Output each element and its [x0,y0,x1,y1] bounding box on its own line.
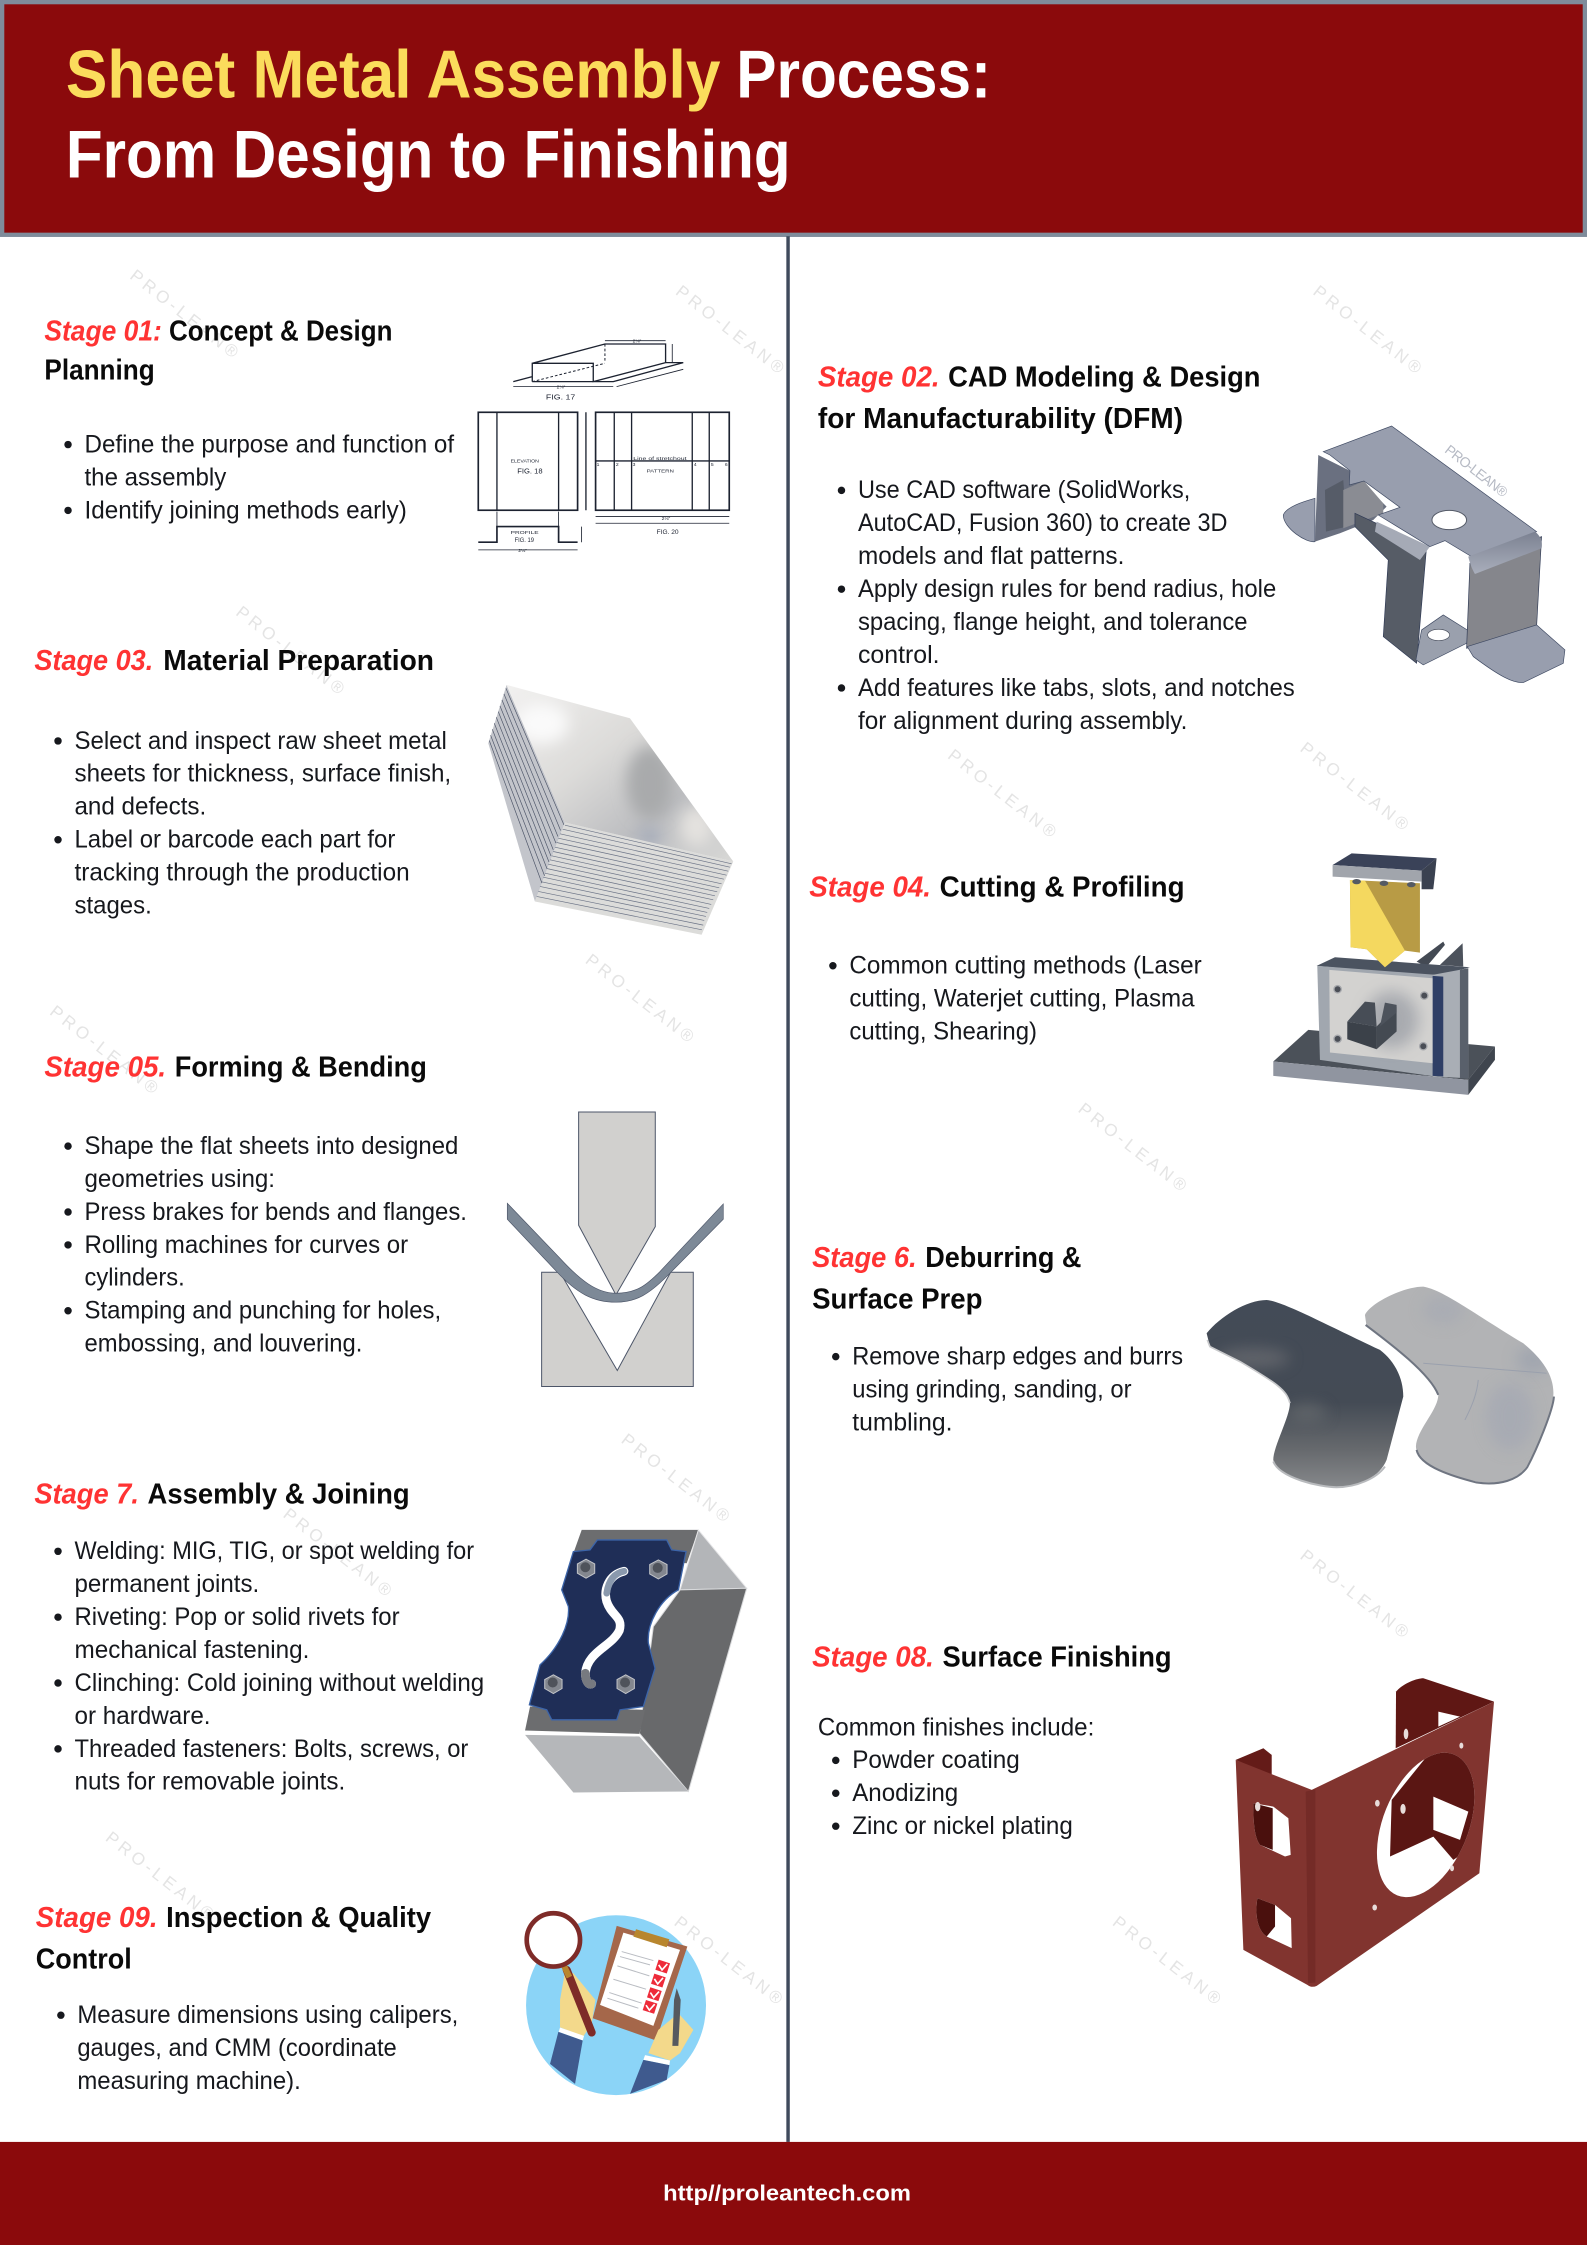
watermarks: PRO-LEAN® [671,1912,787,2009]
bullets: stage 01: Define the purpose and function of [85,430,454,458]
bullets: stage 09 [57,2001,458,2095]
heading: stage 03 [34,645,434,677]
bullets: stage 7 [54,1537,484,1796]
bullets: stage 08: Anodizing [852,1779,958,1807]
watermarks: PRO-LEAN® [1297,1545,1413,1642]
bullets: stage 02: Use CAD software (SolidWorks, [858,476,1190,504]
heading: stage 6 [812,1242,1081,1316]
heading: stage 05: Stage 05. [44,1052,166,1084]
bullets: stage 6: tumbling. [852,1408,952,1436]
panel: stage 6 [812,1242,1554,1487]
center divider [786,236,790,2142]
bullets: stage 05: Rolling machines for curves or [85,1231,408,1259]
bullets: stage 7: Clinching: Cold joining without welding [74,1669,484,1697]
watermark on bracket: PRO-LEAN® [1442,441,1512,501]
watermarks: PRO-LEAN® [582,950,698,1047]
illustration: technical drawing: 2⅛" [557,384,566,390]
bullets: stage 7: nuts for removable joints. [74,1768,345,1796]
heading: stage 05 [44,1052,427,1084]
bullets: stage 02: Add features like tabs, slots, and notches [858,674,1295,702]
bullets: stage 02: AutoCAD, Fusion 360) to create 3D [858,509,1227,537]
bullets: stage 01: the assembly [85,463,227,491]
bullets: stage 02: Apply design rules for bend radius, hole [858,575,1276,603]
illustration: technical drawing: FIG. 20 [657,529,679,536]
bullets: stage 7: Riveting: Pop or solid rivets for [74,1603,400,1631]
heading: stage 08: Surface Finishing [942,1642,1172,1674]
illustration: press brake bending [507,1112,723,1387]
bullets: stage 03: Label or barcode each part for [74,826,395,854]
illustration: technical drawing: 3 [633,462,636,468]
bullets: stage 05: Shape the flat sheets into designed [85,1132,458,1160]
bullets: stage 09: gauges, and CMM (coordinate [77,2034,397,2062]
heading: stage 03: Stage 03. [34,645,153,677]
bullets: stage 01 [64,430,454,524]
bullets: stage 03: stages. [74,891,152,919]
bullets: stage 08: Common finishes include: [818,1713,1094,1741]
panel: stage 01 [44,316,729,554]
bullets: stage 05: cylinders. [85,1264,185,1292]
illustration: cutting tool [1273,853,1495,1095]
title [66,36,991,193]
bullets: stage 03: Select and inspect raw sheet metal [74,727,447,755]
title: From Design to Finishing [66,117,791,193]
illustration: technical drawing: FIG. 18 [517,466,543,475]
heading: stage 6: Deburring & [925,1242,1081,1274]
illustration: technical drawing: 6 [725,462,728,468]
illustration: inspection clipboard [526,1913,706,2095]
watermarks: PRO-LEAN® [1075,1098,1191,1196]
panel: stage 09 [36,1902,706,2095]
heading: stage 04 [809,871,1185,903]
bullets: stage 02 [838,476,1295,735]
illustration: technical drawing: 1 [597,462,600,468]
illustration: bolted assembly [525,1530,747,1792]
heading: stage 05: Forming & Bending [175,1052,427,1084]
panel: stage 03 [34,645,733,935]
bullets: stage 04: cutting, Waterjet cutting, Plasma [849,985,1195,1013]
bullets: stage 03: and defects. [74,793,206,821]
heading: stage 01: Concept & Design [169,316,392,348]
illustration: deburred metal parts [1207,1287,1554,1487]
heading: stage 08: Stage 08. [812,1642,934,1674]
heading: stage 6: Stage 6. [812,1242,917,1274]
heading: stage 02 [818,362,1260,435]
heading: stage 01 [44,316,392,386]
watermarks: PRO-LEAN® [1310,281,1426,378]
heading: stage 09 [36,1902,431,1976]
heading: stage 02: CAD Modeling & Design [948,362,1260,394]
panel: stage 02 [818,362,1565,735]
heading: stage 09: Inspection & Quality [166,1902,431,1934]
heading: stage 01: Stage 01: [44,316,162,348]
illustration: stack of metal sheets [488,685,733,935]
bullets: stage 05: geometries using: [85,1165,275,1193]
heading: stage 01: Planning [44,354,155,386]
illustration: technical drawing: PATTERN [647,469,674,475]
heading: stage 09: Control [36,1944,132,1976]
bullets: stage 7: mechanical fastening. [74,1636,309,1664]
panel: stage 04 [809,853,1495,1095]
bullets: stage 6: Remove sharp edges and burrs [852,1342,1183,1370]
watermarks: PRO-LEAN® [126,265,243,362]
watermarks: PRO-LEAN® [944,745,1061,842]
header banner [2,2,1585,235]
bullets: stage 04 [829,952,1202,1045]
heading: stage 7 [34,1478,410,1510]
watermarks: PRO-LEAN® [232,602,349,699]
heading: stage 02: for Manufacturability (DFM) [818,403,1183,435]
footer bar [0,2142,1587,2245]
title: Process: [736,36,991,112]
illustration: technical drawing: 5 [711,462,714,468]
bullets: stage 02: for alignment during assembly. [858,707,1187,735]
bullets: stage 05 [64,1132,467,1358]
bullets: stage 05: embossing, and louvering. [85,1330,362,1358]
heading: stage 7: Stage 7. [34,1478,139,1510]
heading: stage 09: Stage 09. [36,1902,158,1934]
bullets: stage 7: or hardware. [74,1702,211,1730]
watermarks: PRO-LEAN® [618,1429,734,1526]
bullets: stage 7: Welding: MIG, TIG, or spot welding for [74,1537,474,1565]
panel: stage 7 [34,1478,747,1796]
bullets: stage 04: Common cutting methods (Laser [849,952,1202,980]
bullets: stage 7: Threaded fasteners: Bolts, screws, or [74,1735,468,1763]
illustration: technical drawing: 2 [616,462,619,468]
title: Sheet Metal Assembly [66,36,721,112]
illustration: technical drawing: FIG. 19 [515,537,534,544]
heading: stage 03: Material Preparation [163,645,434,677]
bullets: stage 05: Press brakes for bends and flanges. [85,1198,467,1226]
bullets: stage 7: permanent joints. [74,1570,259,1598]
panel: stage 05 [44,1052,723,1387]
watermarks: PRO-LEAN® [1297,738,1413,835]
bullets: stage 03: sheets for thickness, surface finish, [74,760,451,788]
illustration: technical drawing: PROFILE [511,530,539,536]
illustration: technical drawing: ELEVATION [511,459,539,465]
heading: stage 6: Surface Prep [812,1284,983,1316]
watermarks: PRO-LEAN® [1109,1912,1225,2009]
bullets: stage 02: spacing, flange height, and tolerance [858,608,1248,636]
bullets: stage 08: Zinc or nickel plating [852,1812,1073,1840]
watermarks: PRO-LEAN® [46,1001,163,1098]
heading: stage 08 [812,1642,1172,1674]
illustration: CAD bracket [1283,426,1565,683]
heading: stage 7: Assembly & Joining [148,1478,410,1510]
illustration: technical drawing [478,339,729,554]
bullets: stage 6: using grinding, sanding, or [852,1375,1132,1403]
heading: stage 04: Stage 04. [809,871,931,903]
bullets: stage 05: Stamping and punching for holes, [85,1297,441,1325]
illustration: technical drawing: Line of stretchout [633,456,687,462]
illustration: technical drawing: 2⅛" [633,339,642,345]
panel: stage 08 [812,1642,1494,1987]
bullets: stage 6 [832,1342,1183,1436]
bullets: stage 01: Identify joining methods early) [85,496,407,524]
bullets: stage 03: tracking through the production [74,859,410,887]
illustration: red powder-coated bracket [1236,1678,1494,1987]
illustration: technical drawing: 2⅛" [662,516,671,522]
bullets: stage 09: Measure dimensions using calipers, [77,2001,458,2029]
bullets: stage 08 [818,1713,1094,1840]
watermarks: PRO-LEAN® [280,1504,396,1601]
watermarks: PRO-LEAN® [102,1827,219,1924]
footer url: http//proleantech.com [663,2181,911,2206]
bullets: stage 09: measuring machine). [77,2067,301,2095]
illustration: technical drawing: FIG. 17 [546,392,575,401]
watermarks: PRO-LEAN® [672,281,789,378]
heading: stage 02: Stage 02. [818,362,940,394]
bullets: stage 03 [54,727,451,919]
bullets: stage 04: cutting, Shearing) [849,1017,1037,1045]
bullets: stage 02: models and flat patterns. [858,542,1124,570]
heading: stage 04: Cutting & Profiling [940,871,1185,903]
watermarks [46,265,1426,2009]
bullets: stage 02: control. [858,641,940,669]
bullets: stage 08: Powder coating [852,1746,1020,1774]
illustration: technical drawing: 4 [694,462,697,468]
illustration: technical drawing: 2⅛" [518,548,527,554]
